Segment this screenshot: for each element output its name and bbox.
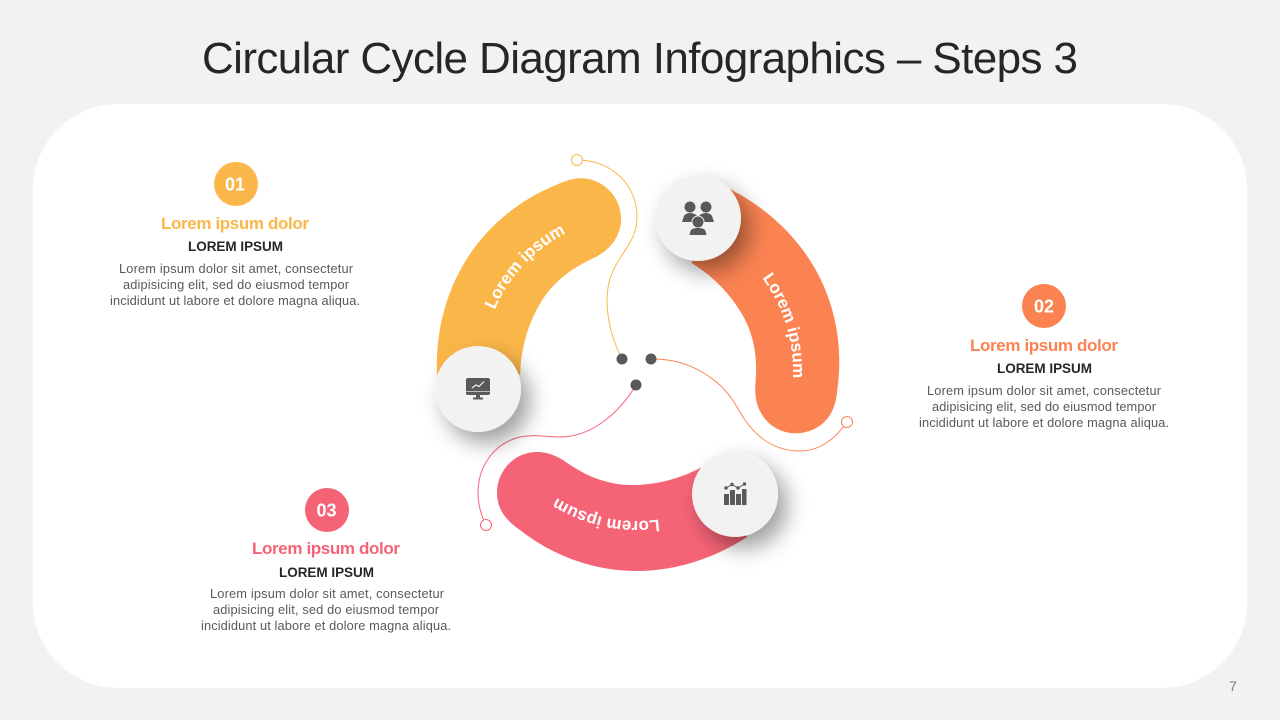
band: yellow segment bbox=[408, 144, 636, 420]
step 03 text block bbox=[201, 488, 451, 633]
icon badge: bar chart bbox=[692, 451, 778, 537]
body 03 bbox=[201, 586, 451, 633]
connector: pink line bbox=[478, 380, 642, 530]
band label: pink: Lorem ipsum bbox=[554, 498, 660, 532]
page number: 7 bbox=[1229, 678, 1237, 694]
connector: orange line bbox=[646, 354, 852, 451]
band label: orange: Lorem ipsum bbox=[762, 272, 802, 378]
heading 03: Lorem ipsum dolor bbox=[252, 539, 400, 558]
icon badge: people bbox=[655, 175, 741, 261]
subheading 01: LOREM IPSUM bbox=[188, 239, 283, 254]
subheading 03: LOREM IPSUM bbox=[279, 565, 374, 580]
body 03: Lorem ipsum dolor sit amet, consectetur bbox=[210, 586, 445, 601]
number badge 01 bbox=[214, 162, 258, 206]
body 01: adipisicing elit, sed do eiusmod tempor bbox=[123, 277, 350, 292]
connector: yellow line bbox=[572, 154, 637, 364]
number badge 01: 01 bbox=[225, 174, 245, 194]
body 03: adipisicing elit, sed do eiusmod tempor bbox=[213, 602, 440, 617]
panel: white background bbox=[33, 104, 1247, 688]
band label: yellow: Lorem ipsum bbox=[484, 226, 565, 309]
body 02 bbox=[919, 383, 1169, 430]
number badge 03 bbox=[305, 488, 349, 532]
heading 02: Lorem ipsum dolor bbox=[970, 336, 1118, 355]
body 02: incididunt ut labore et dolore magna aliqua. bbox=[919, 415, 1169, 430]
body 01: Lorem ipsum dolor sit amet, consectetur bbox=[119, 261, 354, 276]
band: pink segment bbox=[497, 452, 747, 571]
number badge 02 bbox=[1022, 284, 1066, 328]
step 01 text block bbox=[110, 162, 360, 308]
title: Circular Cycle Diagram Infographics – Steps 3 bbox=[202, 34, 1078, 83]
step 02 text block bbox=[919, 284, 1169, 430]
number badge 02: 02 bbox=[1034, 296, 1054, 316]
body 02: Lorem ipsum dolor sit amet, consectetur bbox=[927, 383, 1162, 398]
body 01: incididunt ut labore et dolore magna aliqua. bbox=[110, 293, 360, 308]
icon badge: monitor chart bbox=[435, 346, 521, 432]
number badge 03: 03 bbox=[316, 500, 337, 520]
band: orange segment bbox=[656, 172, 884, 448]
subheading 02: LOREM IPSUM bbox=[997, 361, 1092, 376]
body 03: incididunt ut labore et dolore magna aliqua. bbox=[201, 618, 451, 633]
heading 01: Lorem ipsum dolor bbox=[161, 214, 309, 233]
body 02: adipisicing elit, sed do eiusmod tempor bbox=[932, 399, 1157, 414]
body 01 bbox=[110, 261, 360, 308]
